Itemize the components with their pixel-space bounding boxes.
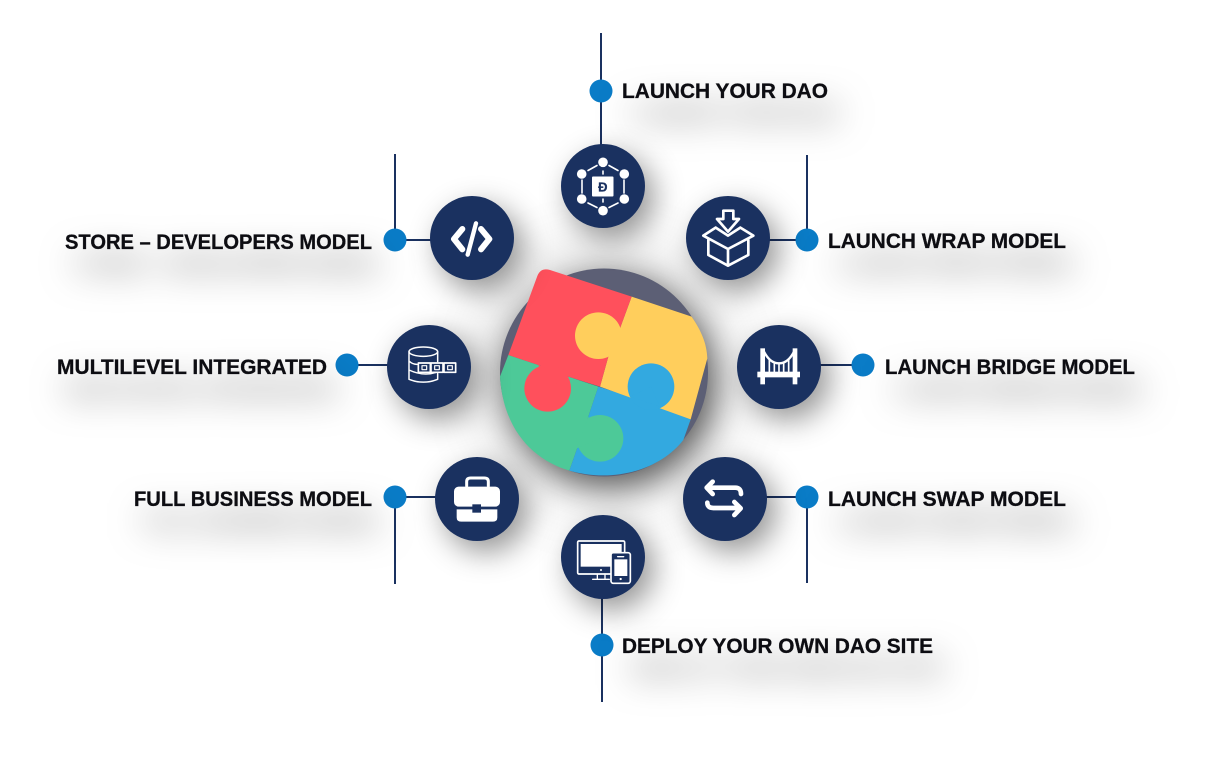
disc [737,325,821,409]
marker [796,228,818,252]
marker [590,80,612,102]
marker [384,228,406,252]
icon: bridge [757,348,800,384]
label: DEPLOY YOUR OWN DAO SITE [622,635,933,658]
node: deploy your own dao site [561,515,933,702]
label: LAUNCH SWAP MODEL [828,488,1066,511]
marker [384,486,406,508]
red piece [508,269,632,387]
label: LAUNCH YOUR DAO [622,80,828,103]
connector [768,155,807,240]
icon: swap arrows [707,482,741,515]
disc [387,325,471,409]
node: store developers model [65,154,514,280]
node: launch bridge model [737,325,1135,409]
label: MULTILEVEL INTEGRATED [57,356,327,379]
disc [686,196,770,280]
connector [818,364,863,366]
node: full business model [134,457,519,584]
blue knob [628,363,674,410]
red knob [524,365,571,412]
icon: briefcase [454,478,500,522]
disc [561,144,645,228]
disc [683,457,767,541]
connector [765,497,807,583]
icon: dao network: Ð [598,180,607,194]
label: FULL BUSINESS MODEL [134,488,372,511]
yellow knob [575,312,622,359]
marker [796,486,818,508]
label: STORE – DEVELOPERS MODEL [65,231,372,254]
disc [435,457,519,541]
connector [347,364,390,366]
node: launch your dao [561,33,828,228]
green knob [577,415,623,462]
yellow piece [600,297,707,419]
connector [395,497,437,584]
icon: database chain [409,347,456,382]
icon: dao network [577,158,629,216]
connector [601,597,603,702]
marker [336,354,358,376]
node: launch swap model [683,457,1066,583]
node: launch wrap model [686,155,1066,280]
green piece [500,355,598,471]
connector [395,154,432,240]
connector [600,33,602,146]
label: LAUNCH WRAP MODEL [828,230,1066,253]
central puzzle graphic [500,268,708,476]
marker [852,354,874,376]
marker [590,634,614,656]
node: multilevel integrated [57,325,471,409]
disc [430,196,514,280]
blue piece [569,387,691,475]
icon: code [454,223,489,255]
icon: box [703,211,753,266]
label: LAUNCH BRIDGE MODEL [885,356,1135,379]
puzzle pieces [500,269,707,475]
icon: monitor and phone [578,541,630,583]
disc [561,515,645,599]
puzzle backing circle [500,268,708,476]
